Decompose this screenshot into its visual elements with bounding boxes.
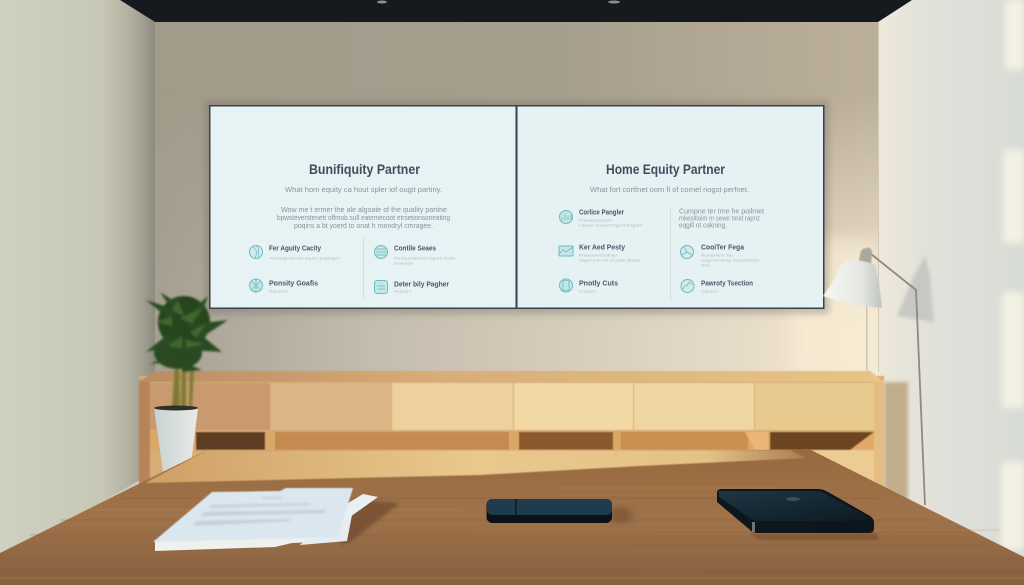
left paragraph: Wow me t ermer the ale algoate of the quality partine bbox=[281, 205, 447, 214]
icon: chart bbox=[560, 210, 572, 224]
papers shadow bbox=[340, 500, 400, 545]
flower pot bbox=[154, 406, 198, 472]
icon: database bbox=[374, 246, 388, 258]
lamp wall shadow bbox=[897, 256, 934, 322]
right paragraph: Cumpne ter tme he poilmet bbox=[679, 206, 765, 216]
icon: globe bbox=[250, 246, 262, 258]
icon: card bbox=[374, 280, 388, 294]
tablet bbox=[717, 489, 880, 540]
feature: CooiTer Fega bbox=[701, 244, 760, 268]
feature: Contile Seaes: Renqumenoet Iogres Ipaid bbox=[394, 256, 455, 260]
sideboard top bbox=[139, 371, 884, 382]
window light patches bbox=[1001, 0, 1024, 550]
lamp cap bbox=[858, 248, 872, 266]
plant bbox=[146, 292, 228, 472]
feature: Ker Aed Pesty: Preasuremsothyp bbox=[579, 252, 618, 258]
feature: CooiTer Fega: wsss bbox=[701, 262, 710, 268]
icon: route bbox=[681, 280, 694, 292]
feature: Deter bily Pagher bbox=[394, 282, 449, 294]
top sheet bbox=[153, 488, 353, 542]
right title: Home Equity Partner bbox=[606, 161, 725, 177]
feature: Ker Aed Pesty: Ker Aed Pesty bbox=[579, 244, 625, 252]
left subtitle: What hom equity ca hout spler iof ougit partiny. bbox=[285, 185, 442, 194]
panel: right screen bbox=[518, 106, 823, 308]
right paragraph: mkesitioim m sewe txrat rapnz bbox=[679, 214, 760, 222]
feature: Pnotly Cuts: Pnotly Cuts bbox=[579, 280, 618, 288]
wood grain bbox=[0, 488, 1024, 578]
table bbox=[0, 450, 1024, 585]
feature: Pawroty Tsection: Cupsen bbox=[701, 288, 718, 294]
feature: Contile Seaes: Dewsesh bbox=[394, 260, 413, 266]
feature: Contile Seaes: Contile Seaes bbox=[394, 246, 436, 252]
floor lamp bbox=[823, 248, 934, 505]
wall display bbox=[209, 105, 824, 309]
feature: Ponsity Goafis: Ponsity Goafis bbox=[269, 280, 318, 288]
feature: Corlice Pangler: Corlice Pangler bbox=[579, 210, 624, 216]
feature: Fer Aguity Cacity: Resmagumenosit loquers pradisgem bbox=[270, 256, 341, 260]
feature: Pawroty Tsection: Pawroty Tsection bbox=[701, 280, 753, 288]
icon: envelope bbox=[559, 246, 573, 256]
feature: Fer Aguity Cacity bbox=[269, 246, 341, 260]
feature: Corlice Pangler: Lanser noousTmgent Brigant bbox=[579, 222, 643, 228]
drawers bbox=[150, 383, 874, 430]
papers bbox=[153, 488, 400, 551]
feature: Deter bily Pagher: Hupsent bbox=[394, 288, 412, 294]
left paragraph: bpwsteverstenett offmob sull eatemecoot etrsetionsoneating bbox=[277, 213, 450, 222]
icon: fan bbox=[680, 246, 694, 258]
left paragraph bbox=[277, 205, 450, 230]
icon: phone bbox=[560, 279, 572, 292]
feature: Ker Aed Pesty: Tagen teen tin chuqisk albdity bbox=[579, 258, 640, 262]
feature: Pnotly Cuts: Cuspren bbox=[579, 288, 596, 294]
right subtitle: What fort cortfnet oom fi of cornel nogst perfnet. bbox=[590, 185, 749, 194]
right paragraph: eqgill ot cakning. bbox=[679, 220, 727, 230]
left wall bbox=[0, 0, 155, 560]
foliage bbox=[146, 292, 228, 408]
feature: Pawroty Tsection bbox=[701, 280, 753, 294]
lamp pole bbox=[871, 254, 925, 505]
back wall bbox=[150, 20, 885, 380]
sideboard wall shadow bbox=[884, 382, 908, 505]
feature: Ponsity Goafis: Hupsent bbox=[269, 288, 288, 294]
feature: Ker Aed Pesty bbox=[579, 244, 640, 262]
phone bbox=[486, 499, 633, 523]
feature: Contile Seaes bbox=[394, 246, 455, 266]
feature: CooiTer Fega: Dagcherdeny neoroditiant bbox=[701, 258, 760, 262]
lower drawer bbox=[810, 450, 874, 484]
ceiling bbox=[120, 0, 912, 22]
feature: Corlice Pangler bbox=[579, 210, 643, 228]
feature: Fer Aguity Cacity: Fer Aguity Cacity bbox=[269, 246, 321, 252]
icon: network bbox=[250, 279, 262, 292]
feature: Deter bily Pagher: Deter bily Pagher bbox=[394, 282, 449, 288]
sideboard bbox=[139, 371, 908, 505]
feature: CooiTer Fega: Reodsment Tsu bbox=[701, 252, 733, 258]
feature: Ponsity Goafis bbox=[269, 280, 318, 294]
left title: Bunifiquity Partner bbox=[309, 161, 420, 177]
right wall bbox=[878, 0, 1024, 585]
lamp shade bbox=[823, 260, 882, 308]
panel: left screen bbox=[210, 106, 516, 308]
right paragraph bbox=[679, 206, 765, 230]
left paragraph: poqins a bt yoerd to onat h roondryl cmragee. bbox=[294, 221, 433, 230]
feature: Corlice Pangler: Prenaurpsoure bbox=[579, 218, 613, 222]
feature: Pnotly Cuts bbox=[579, 280, 618, 294]
open shelves bbox=[150, 431, 874, 450]
feature: CooiTer Fega: CooiTer Fega bbox=[701, 244, 744, 252]
table sunlight bbox=[145, 450, 806, 483]
screen shadow bbox=[205, 101, 829, 314]
